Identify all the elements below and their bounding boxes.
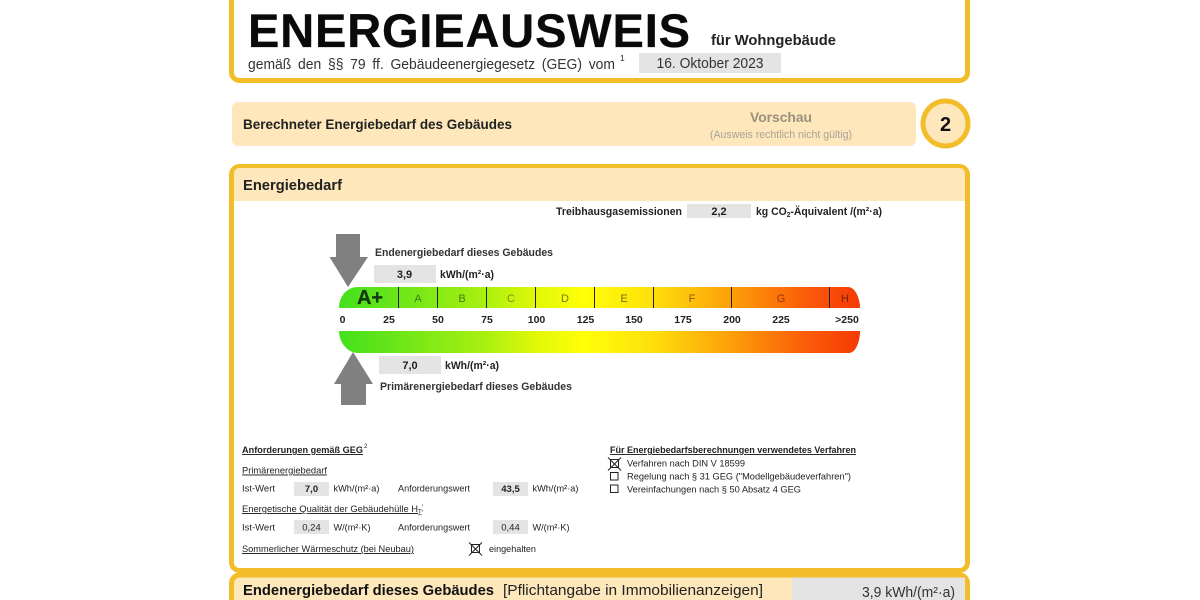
greenhouse gas emissions (556, 204, 882, 219)
primary energy label: Primärenergiebedarf dieses Gebäudes (380, 381, 572, 393)
preview note: (Ausweis rechtlich nicht gültig) (710, 129, 852, 141)
arrow: final energy (330, 234, 368, 287)
panel header band (234, 168, 965, 201)
building envelope requirement: Ist-Wert (242, 522, 275, 534)
scale numbers: 50 (432, 314, 444, 326)
scale numbers: 75 (481, 314, 493, 326)
scale numbers: 0 (340, 314, 346, 326)
greenhouse gas emissions: Treibhausgasemissionen (556, 206, 682, 218)
scale numbers: 225 (772, 314, 790, 326)
requirements block (242, 444, 578, 556)
scale numbers: 200 (723, 314, 741, 326)
date field: 16. Oktober 2023 (656, 56, 764, 72)
greenhouse gas emissions: 2 (787, 212, 791, 219)
primary energy requirement: 7,0 (305, 484, 318, 495)
building envelope requirement: W/(m²·K) (334, 522, 370, 534)
statement value (792, 578, 965, 600)
option: DIN V 18599: Verfahren nach DIN V 18599 (627, 458, 745, 470)
building envelope requirement: 0,44 (501, 522, 520, 534)
title: ENERGIEAUSWEIS (248, 4, 691, 57)
panel: mandatory final energy statement (232, 575, 968, 600)
statement heading: Endenergiebedarf dieses Gebäudes (243, 583, 494, 599)
scale numbers: 175 (674, 314, 692, 326)
primary energy requirement: 43,5 (501, 484, 520, 495)
building envelope requirement: Anforderungswert (398, 522, 470, 534)
class labels: E (620, 293, 628, 305)
class labels (357, 287, 849, 309)
option: Vereinfachungen: Vereinfachungen nach § 50 Absatz 4 GEG (627, 484, 801, 496)
panel header band: Energiebedarf (243, 177, 343, 194)
scale numbers (340, 314, 859, 326)
scale numbers: >250 (835, 314, 859, 326)
building envelope requirement (242, 504, 570, 534)
final energy value: kWh/(m²·a) (440, 269, 494, 281)
summer heat protection (242, 542, 536, 556)
scale dividers (398, 287, 830, 308)
class labels: F (689, 293, 696, 305)
greenhouse gas emissions: kg CO (756, 206, 788, 218)
primary energy value: kWh/(m²·a) (445, 360, 499, 372)
requirements heading: Anforderungen gemäß GEG (242, 445, 363, 456)
panel: Energiebedarf (232, 166, 968, 570)
final energy value: 3,9 (397, 269, 412, 281)
class labels: D (561, 293, 569, 305)
page number badge: 2 (940, 114, 951, 136)
method heading: Für Energiebedarfsberechnungen verwendetes Verfahren (610, 445, 856, 456)
building envelope requirement: ' (422, 504, 423, 512)
banner heading: Berechneter Energiebedarf des Gebäudes (243, 117, 512, 132)
final energy label: Endenergiebedarf dieses Gebäudes (375, 247, 553, 259)
primary energy requirement: kWh/(m²·a) (532, 484, 578, 494)
building envelope requirement: Energetische Qualität der Gebäudehülle H (242, 504, 421, 515)
building envelope requirement: T (418, 510, 422, 516)
greenhouse gas emissions: -Äquivalent /(m²·a) (790, 205, 882, 218)
primary energy gradient bar (339, 331, 860, 353)
primary energy requirement: kWh/(m²·a) (334, 484, 380, 494)
class labels: A+ (357, 287, 383, 309)
primary energy requirement: Primärenergiebedarf (242, 466, 327, 476)
footnote 1: 1 (620, 53, 625, 63)
final energy value (374, 265, 494, 283)
class labels: C (507, 293, 515, 305)
legal basis line: gemäß den §§ 79 ff. Gebäudeenergiegesetz (GEG) vom (248, 57, 615, 73)
building envelope requirement: 0,24 (302, 522, 321, 534)
primary energy requirement: Ist-Wert (242, 484, 275, 494)
page number badge (923, 101, 968, 146)
scale numbers: 150 (625, 314, 643, 326)
primary energy value: 7,0 (402, 360, 418, 372)
class labels: H (841, 293, 849, 305)
class labels: A (414, 293, 422, 305)
option: Modellgebäudeverfahren: Regelung nach § 31 GEG ("Modellgebäudeverfahren") (627, 472, 851, 482)
scale numbers: 25 (383, 314, 395, 326)
date field (639, 53, 781, 73)
preview note (710, 109, 852, 141)
subtitle: building type: für Wohngebäude (711, 32, 836, 49)
preview note: Vorschau (750, 109, 812, 125)
class labels: G (777, 293, 785, 305)
panel: title card (232, 0, 968, 80)
building envelope requirement: W/(m²·K) (532, 522, 570, 534)
arrow: primary energy (334, 352, 373, 405)
summer heat protection: Sommerlicher Wärmeschutz (bei Neubau) (242, 544, 414, 555)
greenhouse gas emissions: 2,2 (711, 206, 727, 218)
scale numbers: 125 (577, 314, 594, 326)
primary energy value (379, 356, 499, 374)
scale numbers: 100 (528, 314, 545, 326)
summer heat protection: eingehalten (489, 544, 536, 555)
class labels: B (458, 293, 466, 305)
requirements heading: 2 (364, 444, 368, 450)
statement note: [Pflichtangabe in Immobilienanzeigen] (503, 583, 763, 599)
energy class scale (339, 287, 860, 309)
primary energy requirement (242, 466, 578, 496)
panel: section banner (232, 102, 916, 146)
calculation method block (608, 445, 856, 496)
primary energy requirement: Anforderungswert (398, 484, 470, 494)
